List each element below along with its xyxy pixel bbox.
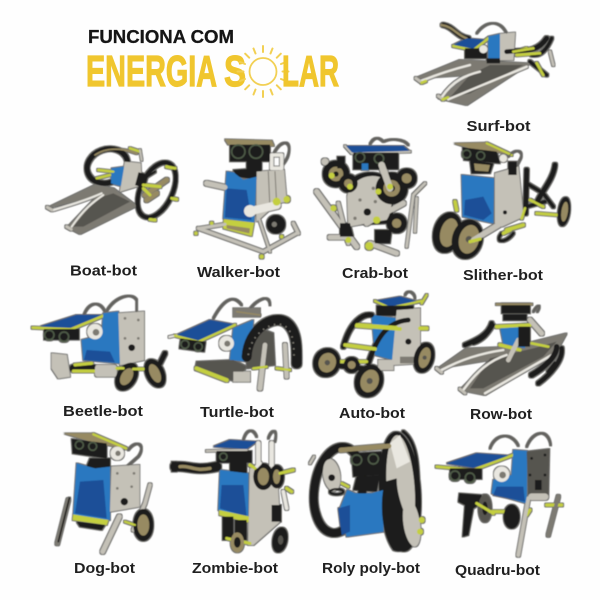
robot: Slither-bot: [428, 143, 572, 263]
label: Boat-bot: Boat-bot: [70, 264, 137, 280]
label: Turtle-bot: Turtle-bot: [200, 405, 274, 421]
robot: Surf-bot: [415, 23, 553, 105]
label: Beetle-bot: Beetle-bot: [63, 404, 143, 420]
label: Slither-bot: Slither-bot: [463, 268, 543, 284]
label: Row-bot: Row-bot: [470, 407, 532, 423]
icon: sun as letter O: [238, 46, 288, 97]
robot: Crab-bot: [317, 138, 425, 253]
robot: Dog-bot: [57, 433, 153, 552]
heading word: Energia: ENERGIA: [86, 47, 217, 96]
heading line: Funciona com: FUNCIONA COM: [88, 26, 234, 47]
robot: Boat-bot: [47, 143, 184, 234]
label: Auto-bot: Auto-bot: [339, 406, 405, 422]
heading letter: S: S: [224, 47, 246, 96]
panel: Slither-bot: [428, 143, 572, 284]
label: Walker-bot: Walker-bot: [197, 265, 280, 281]
panel: Crab-bot: [317, 138, 425, 282]
label: Quadru-bot: Quadru-bot: [455, 563, 540, 579]
panel: Roly poly-bot: [309, 430, 425, 577]
panel: Zombie-bot: [172, 431, 293, 577]
robot: Turtle-bot: [169, 299, 297, 388]
panel: Row-bot: [437, 303, 567, 423]
panel: Dog-bot: [57, 433, 153, 577]
label: Surf-bot: Surf-bot: [466, 119, 531, 135]
label: Roly poly-bot: Roly poly-bot: [322, 561, 420, 577]
title: Funciona com Energia Solar: [86, 26, 339, 97]
label: Crab-bot: Crab-bot: [342, 266, 408, 282]
label: Dog-bot: Dog-bot: [74, 561, 135, 577]
robot: Quadru-bot: [437, 433, 562, 555]
panel: Quadru-bot: [437, 433, 562, 579]
panel: Auto-bot: [309, 292, 438, 422]
robot: Roly poly-bot: [309, 430, 425, 553]
robot: Auto-bot: [309, 292, 438, 401]
panel: Surf-bot: [415, 23, 553, 135]
robot: Row-bot: [437, 303, 567, 395]
robot: Walker-bot: [194, 139, 298, 259]
robot: Beetle-bot: [33, 296, 170, 395]
panel: Boat-bot: [47, 143, 184, 280]
robot: Zombie-bot: [172, 431, 293, 554]
panel: Turtle-bot: [169, 299, 297, 421]
panel: Beetle-bot: [33, 296, 170, 420]
heading letters: LAR: LAR: [282, 47, 339, 96]
panel: Walker-bot: [194, 139, 298, 281]
label: Zombie-bot: Zombie-bot: [192, 561, 278, 577]
